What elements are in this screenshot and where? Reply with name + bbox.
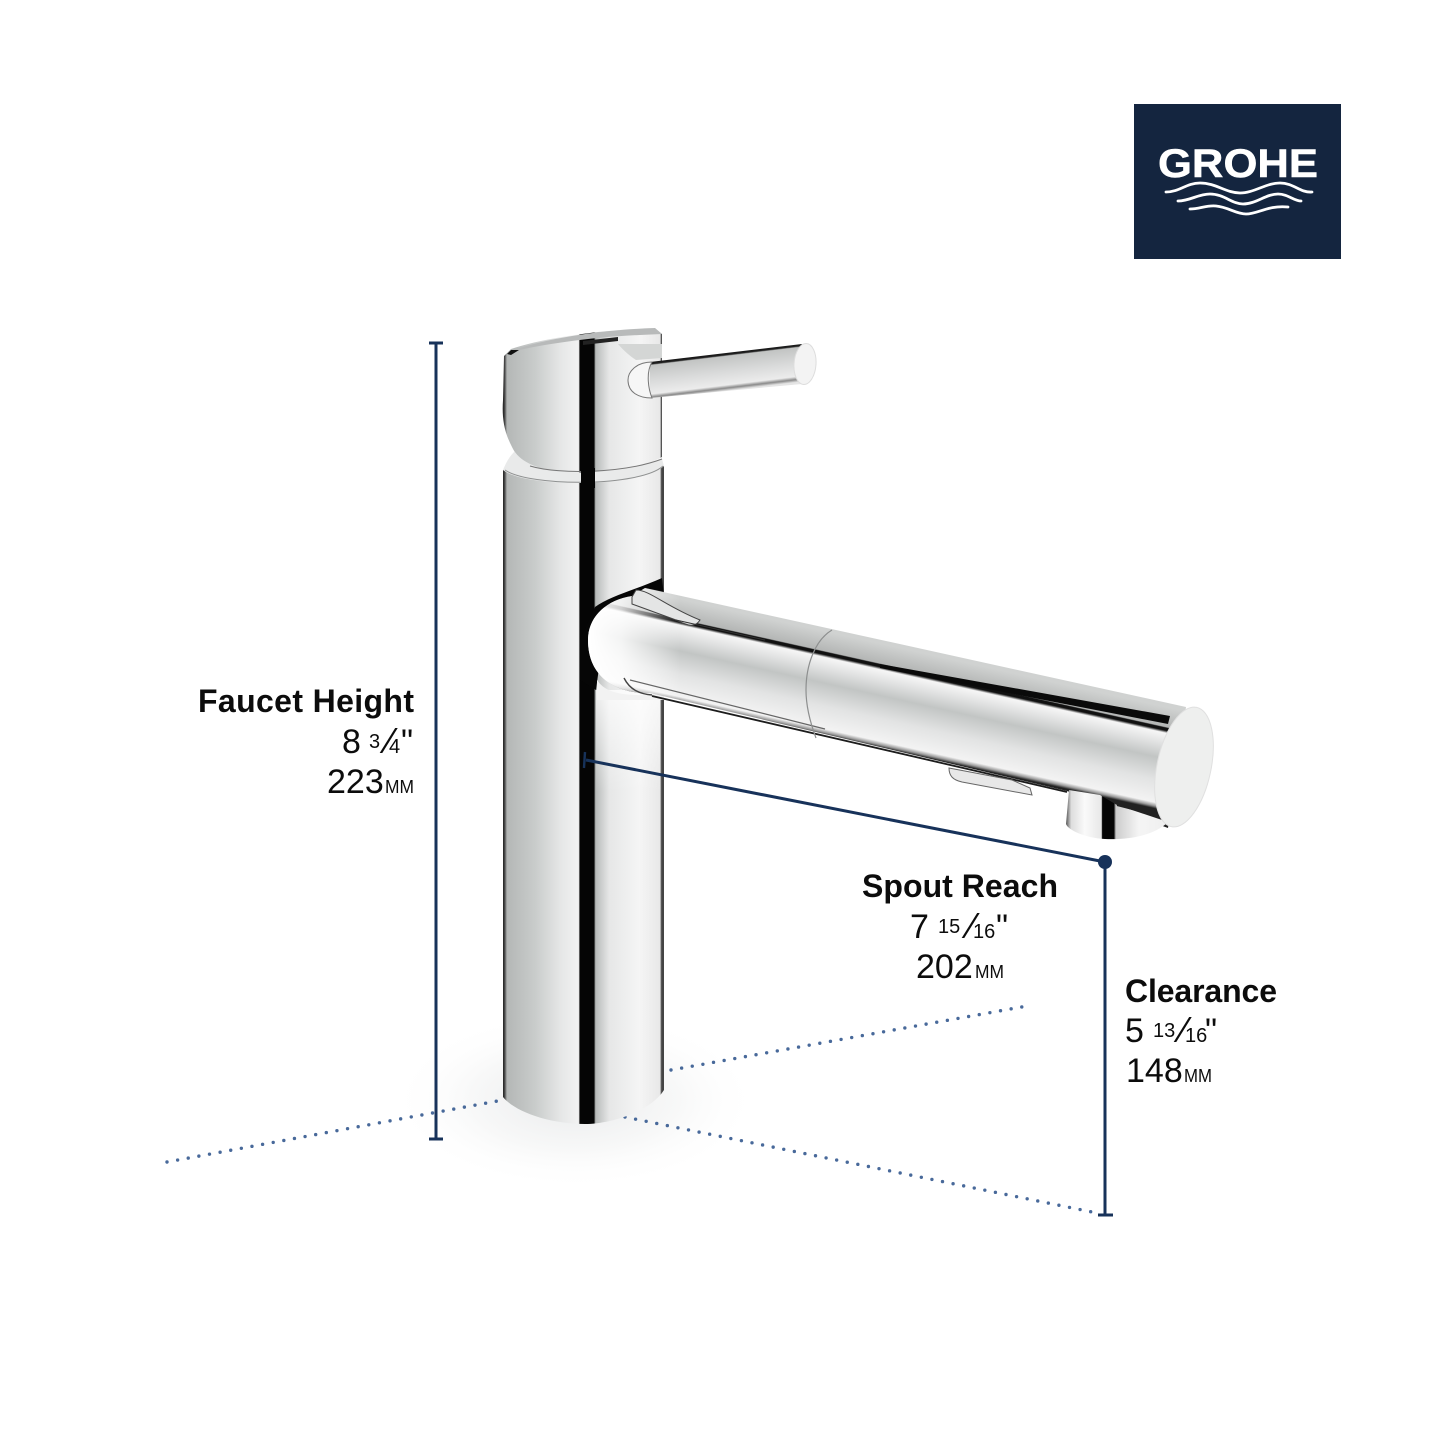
- label: faucet height: ⁄: [379, 720, 398, 761]
- label: spout reach: 202: [916, 948, 973, 986]
- handle head: [503, 328, 662, 472]
- label: clearance: [1125, 973, 1277, 1090]
- spout top thin line: [676, 620, 765, 640]
- label: clearance: 148: [1126, 1052, 1183, 1090]
- faucet: [503, 328, 1223, 1124]
- floor dotted guide lines: [167, 1006, 1097, 1213]
- label: faucet height: ": [401, 723, 413, 761]
- label: faucet height: Faucet Height: [198, 683, 414, 719]
- collar ring: [503, 451, 664, 483]
- label: faucet height: [198, 683, 414, 801]
- label: faucet height: 4: [389, 736, 400, 758]
- floor shadow: [390, 1010, 760, 1190]
- collar line under head: [530, 459, 662, 471]
- GROHE logo: GROHE: [1158, 142, 1318, 186]
- clearance dimension line: [1098, 855, 1113, 1215]
- label: faucet height: MM: [385, 777, 414, 797]
- label: clearance: 13: [1153, 1020, 1175, 1042]
- GROHE logo: [1134, 104, 1341, 259]
- collar stripe: [581, 468, 595, 488]
- handle lever: [628, 343, 817, 398]
- collar shadow line: [505, 466, 663, 482]
- label: spout reach: 15: [938, 916, 960, 938]
- faucet height dimension line: [429, 343, 443, 1139]
- label: spout reach: ": [996, 908, 1008, 946]
- label: spout reach: [862, 868, 1058, 986]
- label: clearance: 16: [1185, 1025, 1207, 1047]
- spout top clip detail: [632, 590, 700, 625]
- pull-out spout body: [588, 588, 1186, 828]
- aerator neck: [1066, 790, 1168, 839]
- spout under edge: [624, 678, 1067, 792]
- spout seam: [806, 630, 832, 738]
- label: spout reach: 16: [973, 921, 995, 943]
- label: clearance: Clearance: [1125, 973, 1277, 1009]
- spout end cap: [1145, 702, 1223, 832]
- aerator dark edge: [1117, 805, 1160, 816]
- label: spout reach: 7: [910, 908, 929, 946]
- spout dark crescent: [580, 578, 664, 690]
- spout reach dimension line: [584, 752, 1105, 862]
- column lower highlight: [596, 690, 660, 1030]
- faucet column: [503, 466, 664, 1124]
- spout base collar: [597, 680, 664, 700]
- spout underside slider: [949, 768, 1032, 795]
- label: faucet height: 223: [327, 763, 384, 801]
- label: clearance: ": [1205, 1012, 1217, 1050]
- label: spout reach: ⁄: [961, 905, 980, 946]
- label: spout reach: Spout Reach: [862, 868, 1058, 904]
- label: faucet height: 8: [342, 723, 361, 761]
- label: clearance: MM: [1184, 1066, 1212, 1086]
- label: clearance: 5: [1125, 1012, 1144, 1050]
- label: clearance: ⁄: [1173, 1009, 1192, 1050]
- black reflection thickening near cap: [880, 664, 1170, 724]
- spout end highlight: [588, 588, 680, 700]
- label: faucet height: 3: [369, 731, 380, 753]
- label: spout reach: MM: [975, 962, 1004, 982]
